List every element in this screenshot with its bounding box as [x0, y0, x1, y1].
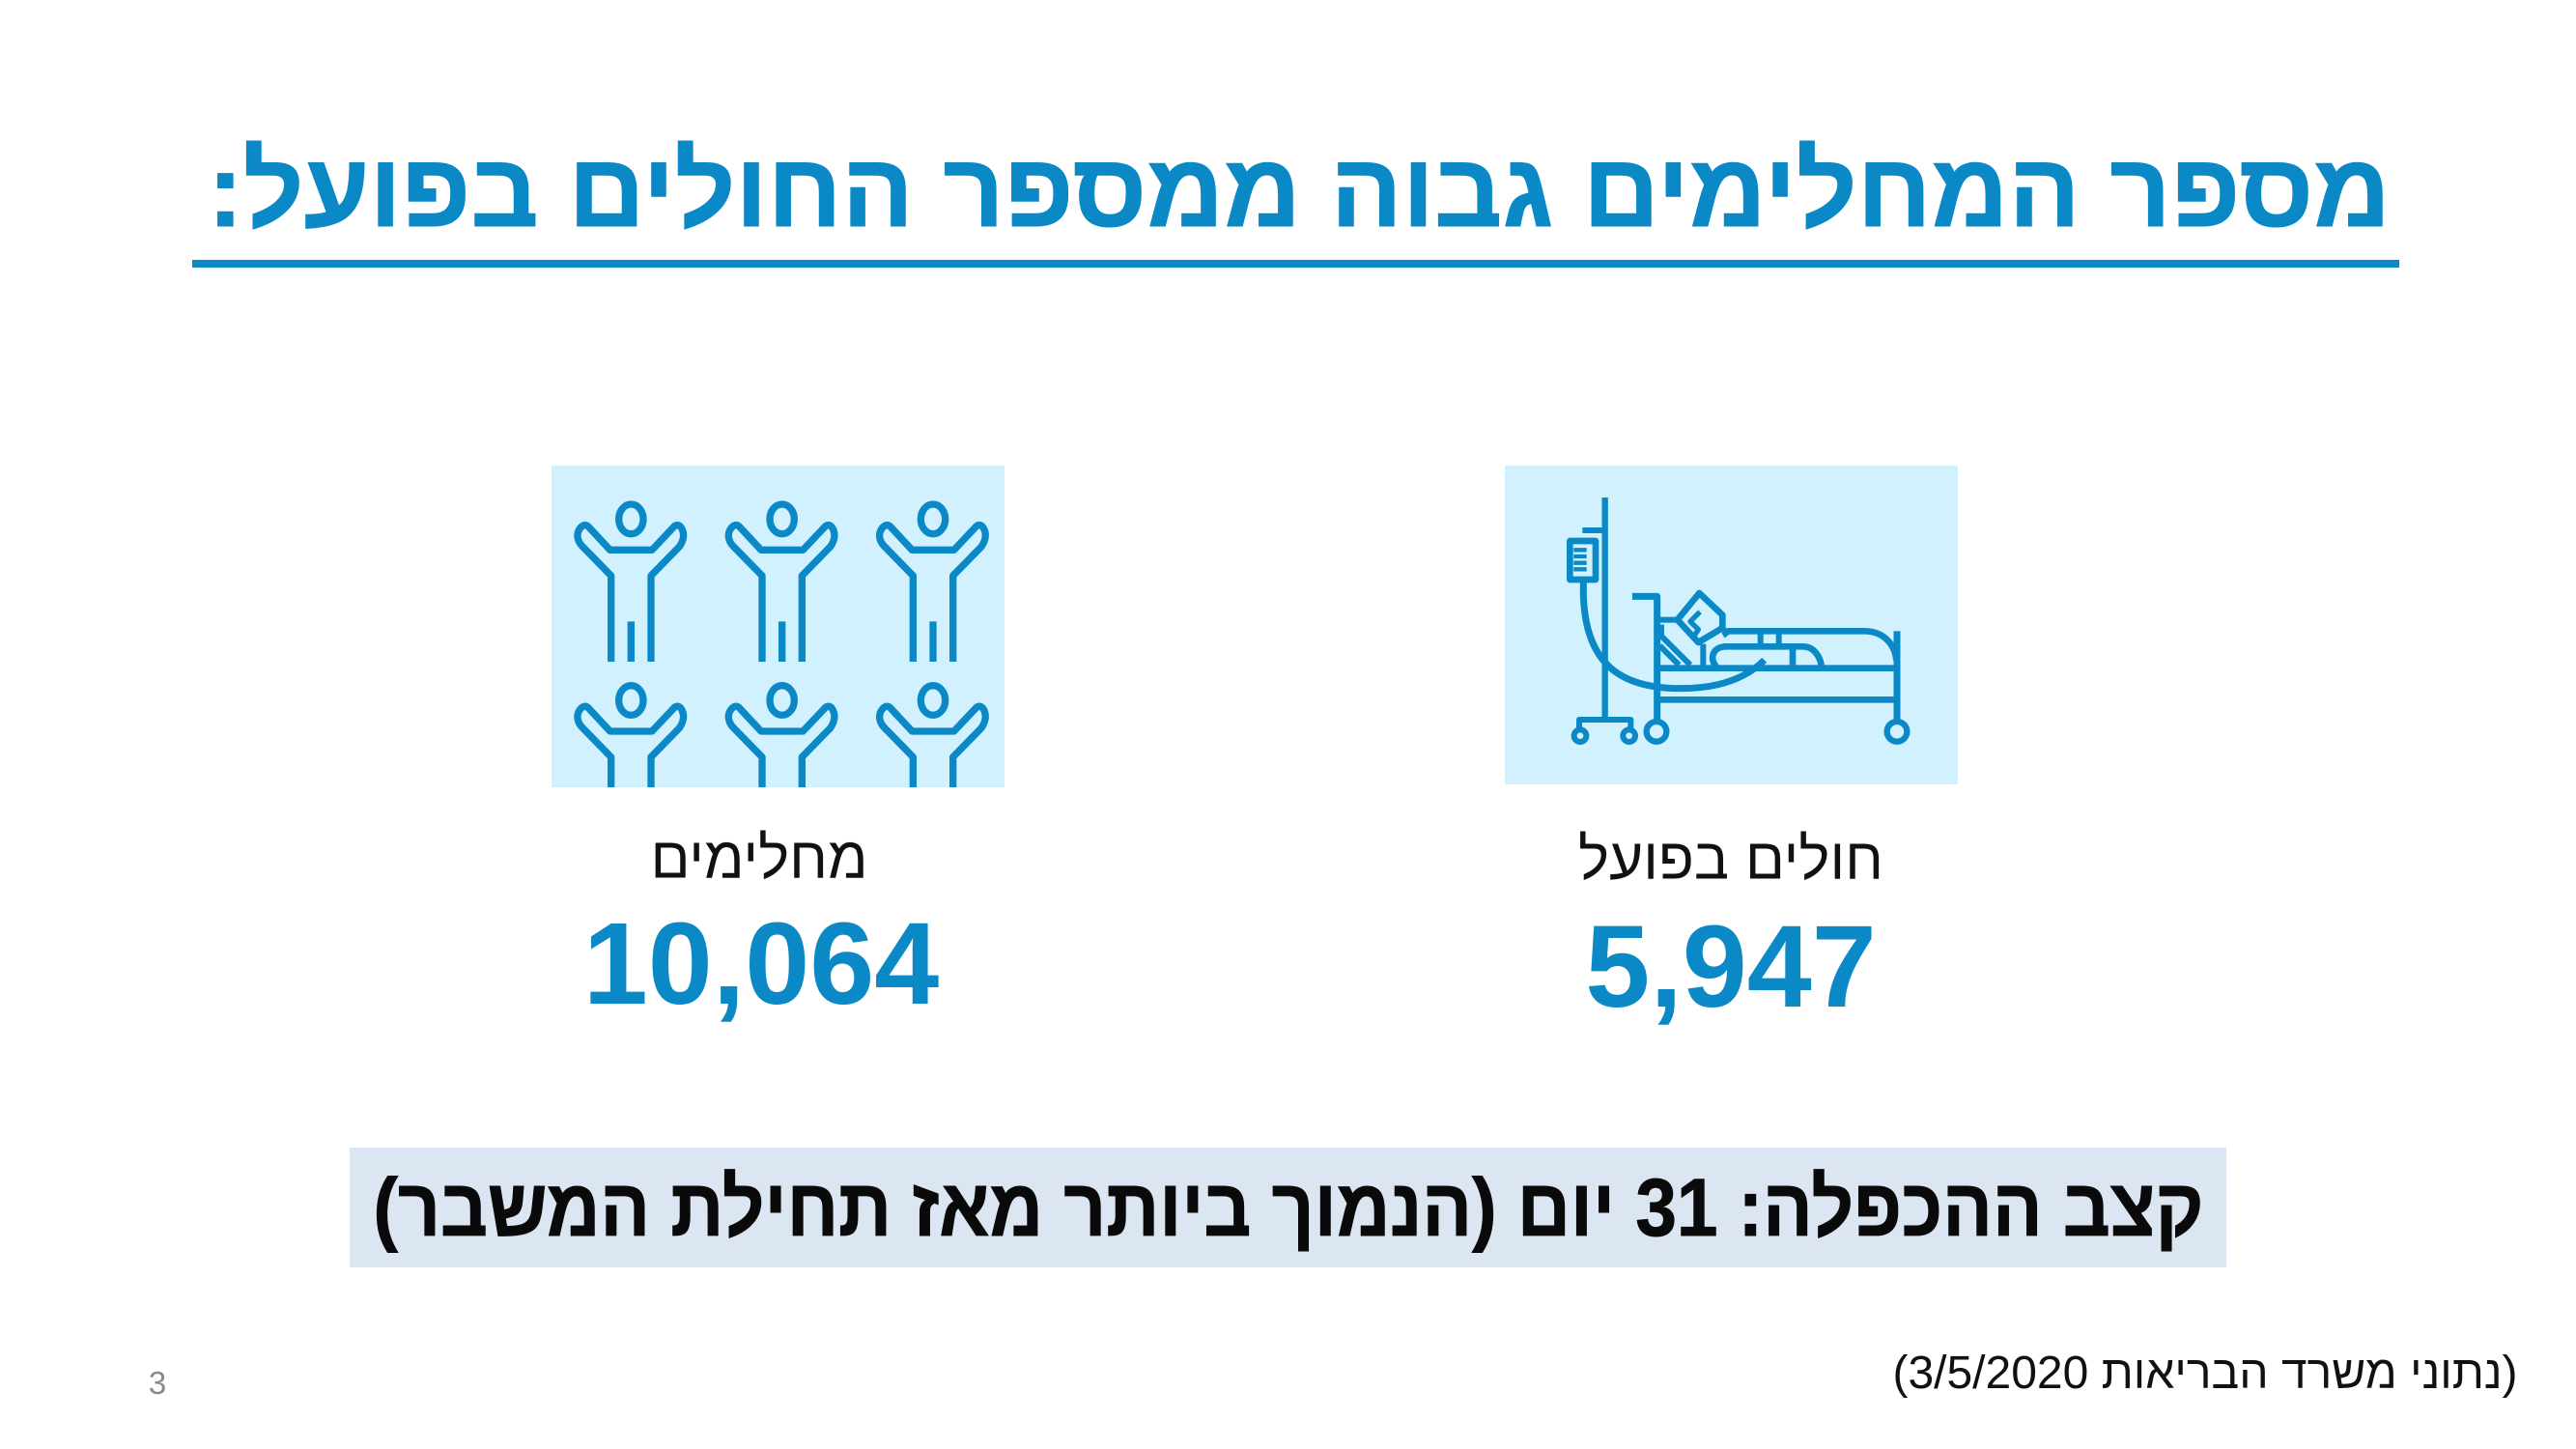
page number: 3	[149, 1365, 166, 1401]
panel: active patients icon	[1505, 466, 1958, 784]
callout: doubling rate: קצב ההכפלה: 31 יום (הנמוך ביותר מאז תחילת המשבר)	[373, 1162, 2204, 1253]
panel: recovered icon	[552, 466, 1005, 787]
number: active patients: 5,947	[1585, 901, 1877, 1032]
icon: hospital bed with IV	[1570, 497, 1907, 742]
icon: person row 2 right	[875, 682, 989, 787]
number: recovered: 10,064	[583, 898, 939, 1029]
label: active patients: חולים בפועל	[1578, 826, 1883, 892]
label: recovered: מחלימים	[650, 825, 868, 891]
title: מספר המחלימים גבוה ממספר החולים בפועל:	[208, 131, 2391, 248]
icon: person row 2 middle	[724, 682, 838, 787]
icon: person row 1 middle	[728, 504, 835, 662]
icon: person row 1 left	[578, 504, 684, 662]
icon: person row 2 left	[574, 682, 688, 787]
source note: (נתוני משרד הבריאות 3/5/2020)	[1892, 1348, 2518, 1399]
icon: person row 1 right	[880, 504, 985, 662]
